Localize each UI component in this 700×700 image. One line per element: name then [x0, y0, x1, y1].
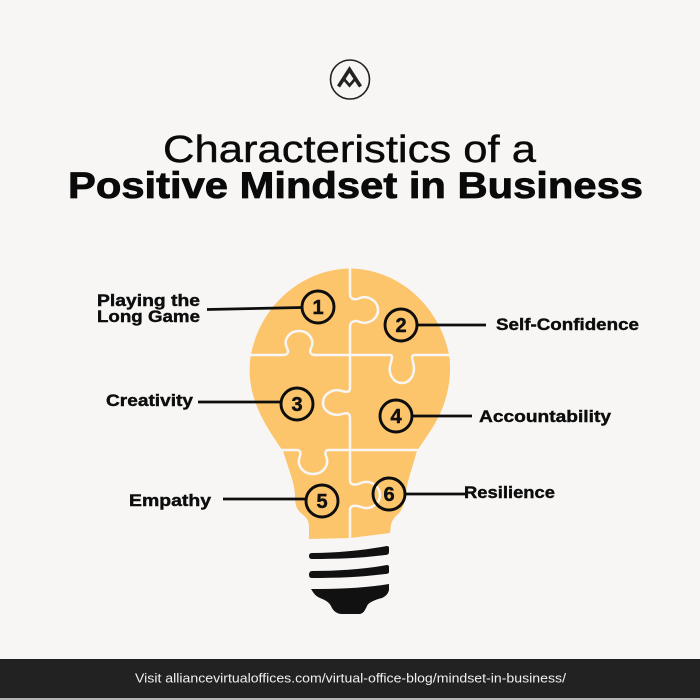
item 4: Accountability: Accountability	[479, 408, 612, 426]
item 1: Playing the Long Game	[97, 291, 334, 326]
item 6: Resilience	[373, 478, 555, 510]
item 3: Creativity	[106, 388, 313, 420]
bulb glass silhouette	[250, 268, 450, 539]
item 3: Creativity: Creativity	[106, 392, 194, 410]
item 1: Playing the Long Game: Playing the	[97, 292, 200, 310]
item 6: Resilience: 6	[383, 484, 395, 506]
screw thread 1	[309, 546, 389, 559]
item 5: Empathy: 5	[316, 491, 328, 513]
item 1: Playing the Long Game: Long Game	[97, 308, 200, 326]
item 4: Accountability: 4	[390, 406, 402, 428]
footer bar	[0, 659, 700, 700]
footer bar: Visit alliancevirtualoffices.com/virtual-office-blog/mindset-in-business/	[135, 670, 566, 686]
lightbulb puzzle	[248, 266, 452, 614]
item 3: Creativity: 3	[291, 394, 303, 416]
item 1: Playing the Long Game: 1	[312, 297, 324, 319]
title	[68, 129, 643, 206]
item 6: Resilience: Resilience	[464, 484, 555, 502]
title: Positive Mindset in Business	[68, 165, 643, 206]
item 2: Self-Confidence: Self-Confidence	[496, 316, 639, 334]
item 2: Self-Confidence: 2	[395, 315, 407, 337]
item 5: Empathy	[129, 485, 338, 517]
screw thread 2	[309, 565, 389, 578]
bulb cap	[311, 584, 389, 614]
item 2: Self-Confidence	[385, 309, 639, 341]
item 4: Accountability	[380, 400, 612, 432]
title: Characteristics of a	[163, 129, 537, 171]
puzzle seams	[248, 266, 452, 541]
item 5: Empathy: Empathy	[129, 492, 212, 510]
logo	[330, 60, 370, 99]
